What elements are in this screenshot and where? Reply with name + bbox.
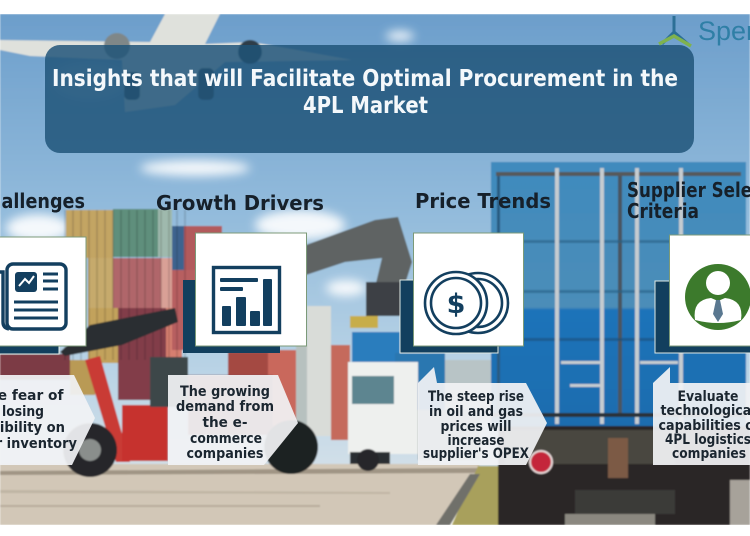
column: growth drivers [156, 191, 324, 465]
callout: supplier selection criteria: Evaluate [678, 389, 738, 405]
callout: price trends [418, 367, 547, 465]
callout: growth drivers: the e- [202, 415, 248, 431]
column: challenges [0, 189, 95, 465]
ground [0, 464, 505, 525]
title text: 4PL Market [303, 93, 428, 119]
title text: Insights that will Facilitate Optimal Procurement in the [52, 66, 678, 92]
icon card: coins [400, 233, 524, 353]
column: price trends [400, 189, 551, 465]
reach stacker vehicle [60, 308, 379, 477]
callout: growth drivers: companies [186, 446, 264, 462]
callout: growth drivers: The growing [180, 384, 270, 400]
container crane [306, 217, 412, 328]
callout: growth drivers [168, 375, 298, 465]
title panel [45, 45, 694, 153]
callout: price trends: increase [448, 433, 504, 449]
callout: price trends: prices will [440, 419, 512, 435]
clouds [6, 31, 414, 296]
logo [659, 16, 750, 46]
callout: price trends: The steep rise [428, 389, 524, 405]
callout: price trends: in oil and gas [429, 404, 523, 420]
heading: supplier selection criteria: Criteria [627, 199, 699, 223]
rail car undercarriage [498, 426, 750, 525]
heading: growth drivers: Growth Drivers [156, 191, 324, 215]
heading: price trends: Price Trends [415, 189, 551, 213]
callout: price trends: supplier's OPEX [423, 446, 529, 462]
callout: supplier selection criteria [653, 367, 750, 465]
icon: person in green circle [685, 264, 750, 330]
column: supplier selection criteria [627, 178, 750, 465]
icon card: supplier [655, 235, 750, 353]
callout: growth drivers: demand from [176, 399, 274, 415]
icon: report with bars [214, 268, 280, 332]
callout: challenges: losing [2, 404, 44, 420]
callout: growth drivers: commerce [190, 431, 262, 447]
airplane [0, 14, 352, 112]
stacked containers left [0, 209, 350, 460]
icon card: newspaper [0, 237, 86, 354]
large blue shipping container [491, 162, 746, 426]
callout: challenges [0, 375, 95, 465]
icon card: bar chart [183, 233, 306, 353]
blue containers and truck [348, 332, 491, 470]
icon: newspaper [0, 264, 66, 329]
icon: coins: $ [447, 289, 465, 320]
